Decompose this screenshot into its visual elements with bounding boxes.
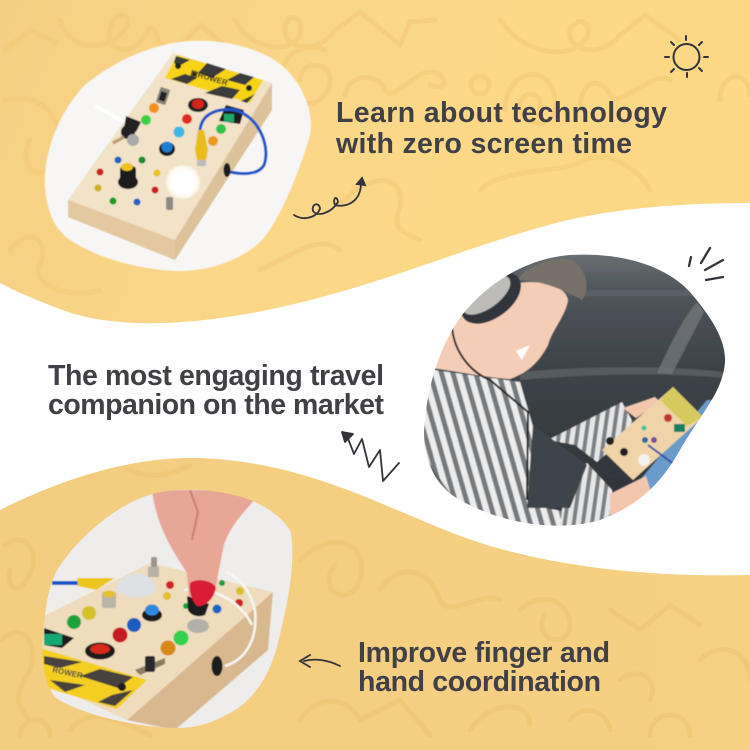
yellow warning plate (165, 55, 263, 103)
title text 2 (48, 360, 384, 421)
jack (224, 163, 230, 177)
seat belt (527, 425, 587, 508)
red button (188, 98, 208, 112)
headphones (462, 273, 522, 324)
smile (516, 345, 530, 360)
top yellow band with doodles (0, 0, 750, 330)
red nail (190, 580, 216, 606)
shadow under shirt (428, 460, 452, 494)
yellow plate (40, 648, 147, 709)
dome light (116, 574, 156, 598)
yellow plug (195, 130, 208, 160)
metal button (102, 592, 116, 608)
blob panel: wooden board on white (45, 41, 311, 271)
board in hands (602, 387, 703, 480)
icon: burst lines (689, 248, 723, 280)
white blob (45, 41, 311, 271)
title text 1: with zero screen time (335, 128, 632, 160)
knob (118, 175, 138, 189)
board body (68, 53, 272, 260)
rocker (44, 628, 74, 648)
wood side (127, 592, 273, 730)
hand and finger (152, 490, 258, 602)
title text 3: Improve finger and (358, 637, 610, 669)
blue wire (200, 110, 266, 174)
blue button (142, 608, 162, 622)
bottom yellow band with doodles (0, 450, 750, 750)
wood top (40, 563, 273, 720)
torso in stripes (424, 369, 562, 526)
icon: small left arrow (300, 655, 340, 667)
neck and face (432, 282, 568, 379)
upper hand (623, 397, 660, 418)
toggle (150, 556, 158, 568)
toggle (166, 197, 173, 210)
plate logo: ROWER (52, 665, 84, 680)
jack (212, 656, 222, 676)
red button (85, 642, 115, 660)
title text 1: Learn about technology (336, 97, 667, 129)
hair (518, 259, 587, 300)
title text 2: The most engaging travel (48, 360, 384, 392)
icon: curly arrow (294, 178, 365, 218)
wire and plug (52, 581, 80, 585)
title text 1 (335, 97, 667, 160)
panel: child photo (420, 250, 730, 540)
LEDs (94, 103, 226, 206)
headphone cord (452, 323, 528, 500)
arm (548, 402, 636, 462)
car interior (434, 254, 726, 512)
icon: sun (665, 36, 708, 77)
plate logo: ▣ROWER (189, 68, 229, 88)
rocker switch (219, 105, 244, 124)
metal nut (187, 619, 209, 633)
key switch (95, 106, 125, 122)
photo background (40, 485, 300, 735)
jeans (641, 399, 712, 490)
black cap under finger (187, 596, 209, 616)
blue button (159, 142, 175, 156)
panel: finger pressing board (40, 485, 300, 735)
switch (156, 87, 170, 105)
title text 3 (358, 637, 610, 698)
icon: zigzag arrow (342, 432, 399, 481)
glowing light (165, 164, 201, 200)
LEDs (67, 580, 244, 656)
lower hand (610, 476, 651, 518)
black switch (135, 658, 165, 675)
title text 3: hand coordination (358, 666, 601, 698)
title text 2: companion on the market (48, 389, 384, 421)
white wire (184, 572, 255, 666)
